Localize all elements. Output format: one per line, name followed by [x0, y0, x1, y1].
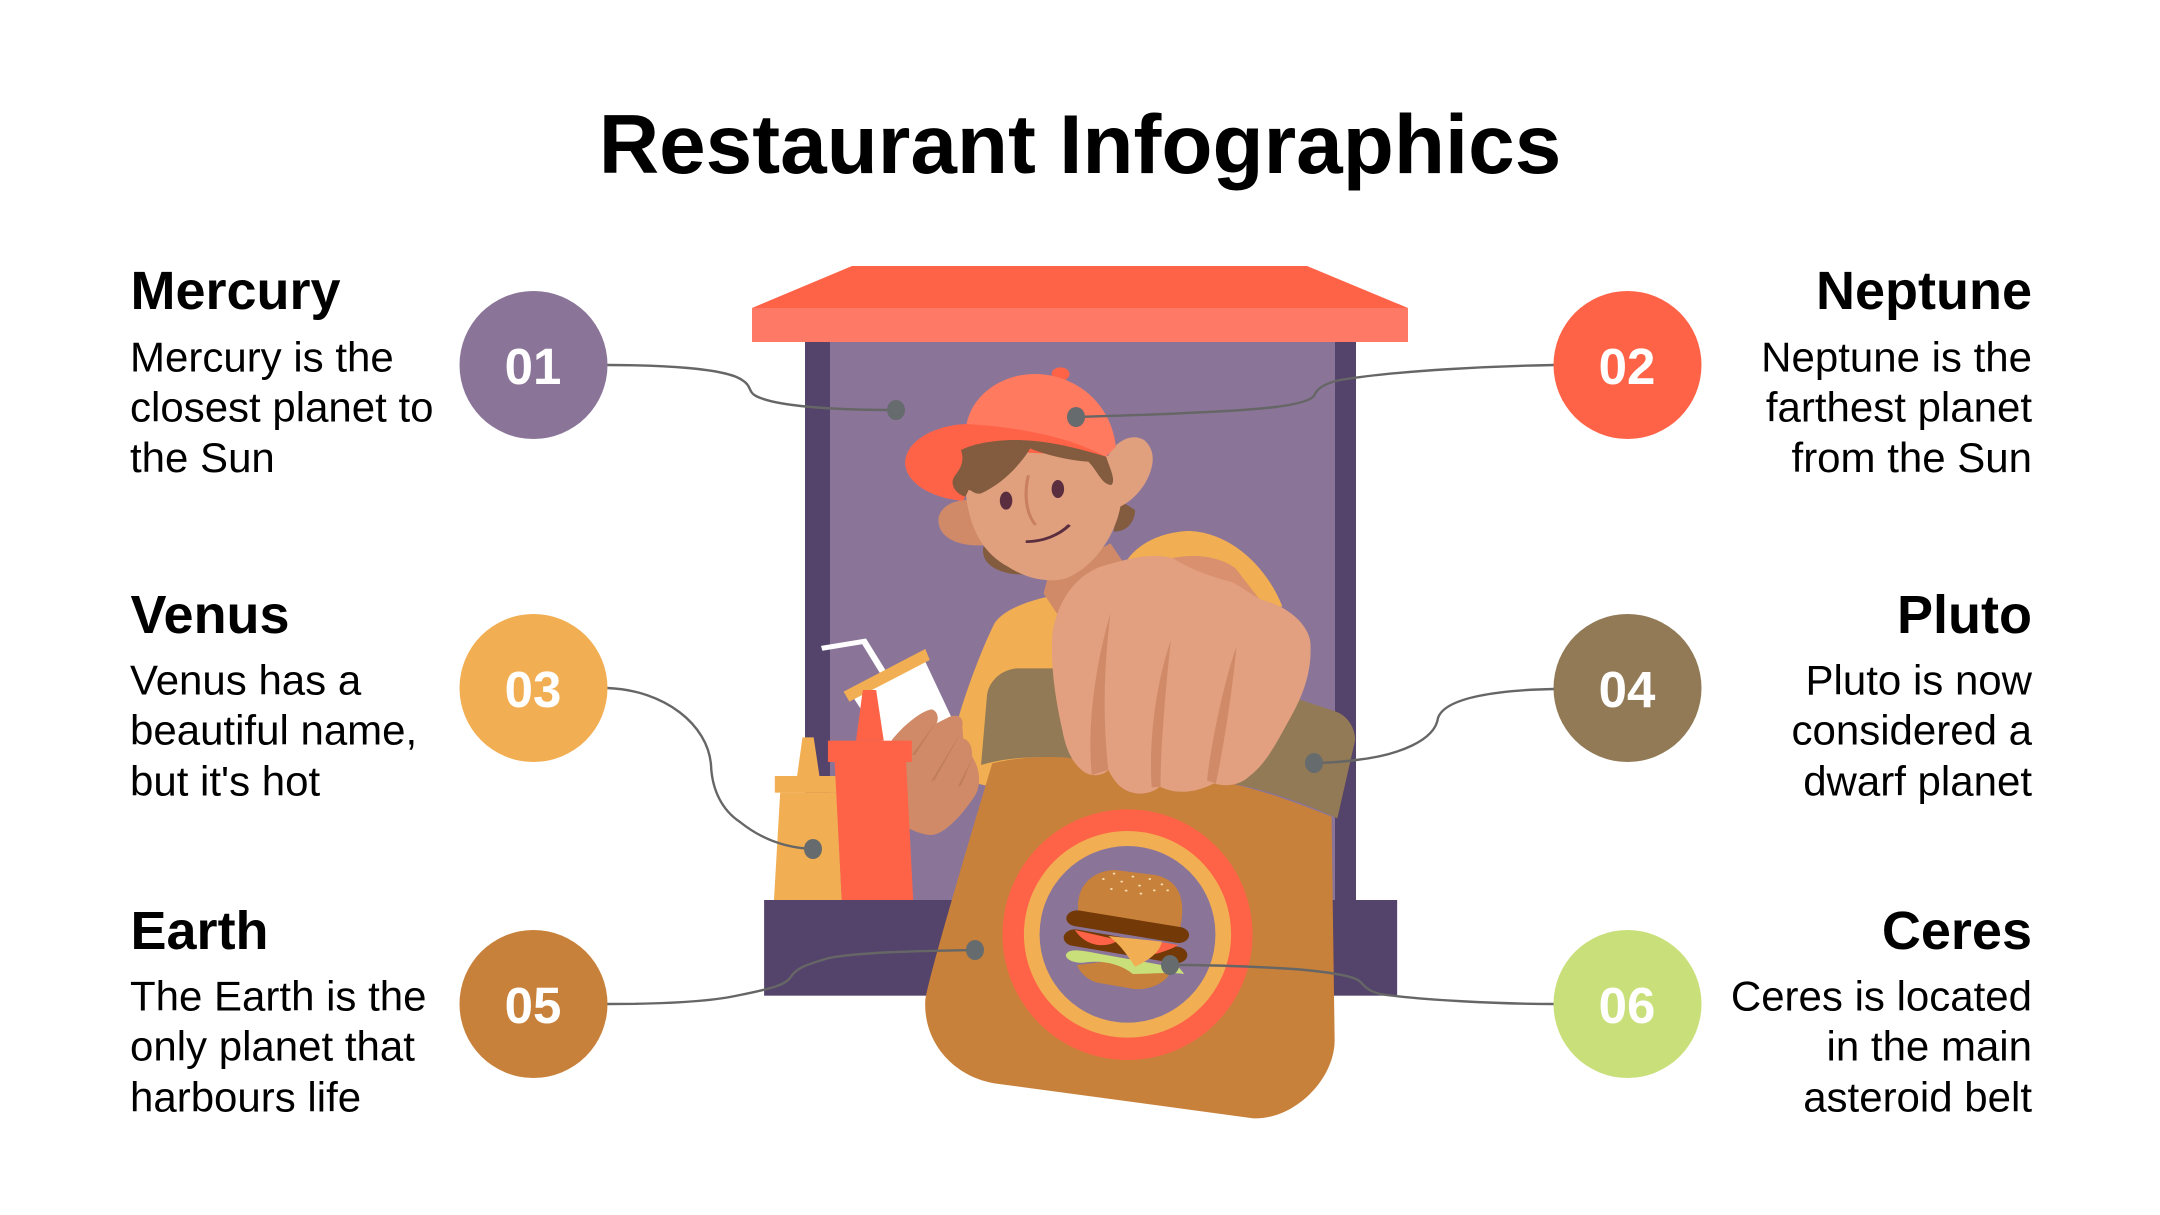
- worker shirt: [950, 531, 1282, 787]
- connector 06: [1161, 955, 1554, 1004]
- small hand: [892, 709, 979, 835]
- text block: Venus: Venus: [130, 585, 290, 645]
- text block: Neptune: from the Sun: [1792, 434, 2032, 481]
- finger grooves: [1090, 613, 1236, 787]
- text block: Ceres: [1731, 901, 2032, 1120]
- text block: Venus: beautiful name,: [130, 706, 417, 754]
- cap: [905, 367, 1116, 501]
- text block: Neptune: Neptune: [1816, 261, 2032, 321]
- badge 02: 02: [1599, 338, 1655, 395]
- text block: Mercury: Mercury is the: [130, 334, 394, 380]
- badge 06: [1554, 930, 1702, 1078]
- text block: Ceres: Ceres: [1882, 901, 2032, 961]
- cup: [854, 662, 954, 757]
- worker: [822, 367, 1282, 787]
- face: [963, 440, 1120, 580]
- badge 04: [1554, 614, 1702, 762]
- text block: Mercury: [130, 261, 434, 481]
- badge 03: [460, 614, 608, 762]
- ketchup bottle: [828, 690, 913, 901]
- text block: Pluto: considered a: [1792, 706, 2033, 754]
- badge 01: 01: [505, 338, 561, 395]
- upper arm sleeve and big hand: [981, 556, 1355, 818]
- text block: Ceres: in the main: [1827, 1022, 2032, 1070]
- text block: Venus: Venus has a: [130, 656, 362, 704]
- text block: Ceres: asteroid belt: [1803, 1074, 2032, 1120]
- mustard bottle: [774, 737, 842, 901]
- badge 01: [460, 291, 608, 439]
- badge 06: 06: [1599, 977, 1655, 1034]
- badge 05: [460, 930, 608, 1078]
- eyes: [1000, 480, 1064, 510]
- text block: Pluto: Pluto: [1897, 585, 2032, 645]
- sleeve: [981, 668, 1355, 818]
- text block: Neptune: Neptune is the: [1761, 334, 2032, 380]
- big hand: [1052, 556, 1311, 794]
- near ear: [1107, 437, 1153, 507]
- text block: Mercury: closest planet to: [130, 384, 434, 430]
- text block: Earth: Earth: [130, 901, 269, 961]
- hair back: [983, 502, 1135, 575]
- text block: Earth: The Earth is the: [130, 972, 426, 1020]
- title: Restaurant Infographics: [599, 97, 1561, 191]
- badge 03: 03: [505, 661, 561, 718]
- hair: [953, 440, 1113, 497]
- text block: Earth: harbours life: [130, 1074, 361, 1120]
- kiosk roof: [752, 266, 1408, 342]
- back of hand shadow: [1171, 556, 1260, 600]
- badge 05: 05: [505, 977, 561, 1034]
- lower illustration: [764, 690, 1397, 1118]
- cup lid: [844, 649, 930, 702]
- connector 02: [1067, 365, 1554, 427]
- connector 04: [1305, 689, 1554, 773]
- text block: Neptune: [1761, 261, 2032, 481]
- badge 02: [1554, 291, 1702, 439]
- text block: Earth: only planet that: [130, 1022, 415, 1070]
- text block: Venus: but it's hot: [130, 758, 320, 804]
- connector 03: [607, 688, 822, 859]
- mouth: [1026, 525, 1069, 542]
- straw: [822, 641, 884, 673]
- text block: Mercury: Mercury: [130, 261, 341, 321]
- nose: [1026, 475, 1036, 525]
- text block: Pluto: dwarf planet: [1803, 758, 2032, 804]
- connector 01: [607, 365, 905, 420]
- burger: [1066, 870, 1184, 989]
- counter: [764, 900, 1397, 996]
- kiosk wall: [805, 342, 1356, 902]
- far ear: [938, 500, 986, 545]
- text block: Pluto: [1792, 585, 2033, 804]
- connector 05: [607, 940, 984, 1004]
- paper bag: [925, 757, 1335, 1118]
- bag logo rings: [1003, 809, 1253, 1060]
- worker neck: [1044, 543, 1124, 615]
- illustration: restaurant worker handing a bag from a kiosk: [752, 266, 1408, 1118]
- text block: Neptune: farthest planet: [1766, 384, 2032, 430]
- text block: Mercury: the Sun: [130, 434, 275, 481]
- text block: Earth: [130, 901, 426, 1120]
- text block: Venus: [130, 585, 417, 804]
- text block: Pluto: Pluto is now: [1806, 656, 2033, 704]
- badge 04: 04: [1599, 661, 1656, 718]
- text block: Ceres: Ceres is located: [1731, 972, 2032, 1020]
